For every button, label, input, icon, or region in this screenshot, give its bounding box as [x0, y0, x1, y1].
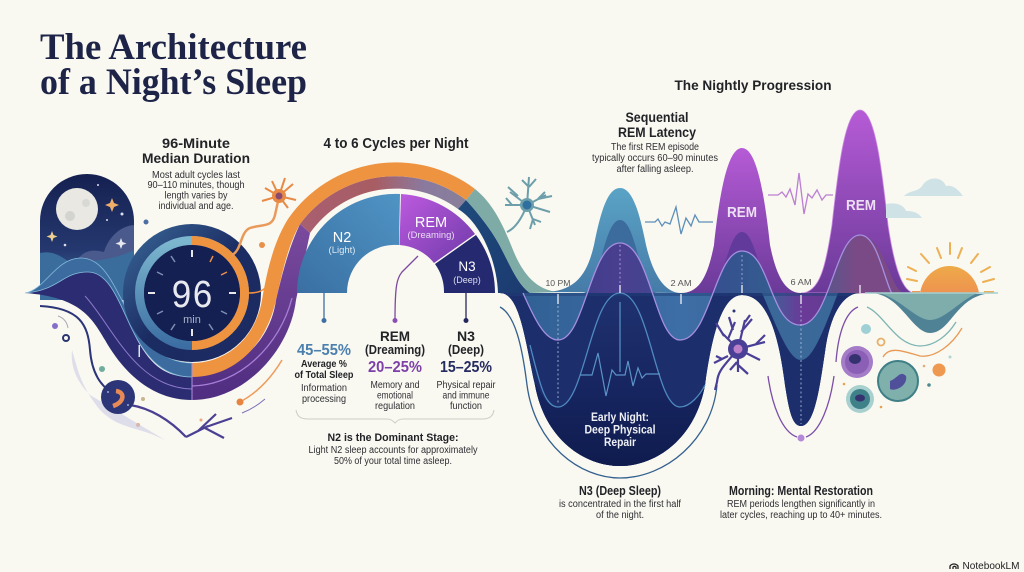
wave: orange and purple cycle band	[192, 162, 475, 400]
icon: purple neuron	[714, 310, 765, 390]
stat: N3 15-25%: Physical repair	[436, 380, 496, 391]
blue stage line	[530, 293, 705, 407]
wave: morning teal dip	[865, 293, 998, 333]
segment: REM dreaming: REM	[415, 215, 447, 231]
stat: REM 20-25%: regulation	[375, 401, 415, 412]
crest: third REM peak	[801, 110, 915, 293]
text block: sequential REM latency: REM Latency	[618, 125, 696, 140]
icon: microbe cells	[841, 324, 952, 413]
stat: REM 20-25%: (Dreaming)	[365, 342, 425, 357]
text block: sequential REM latency: Sequential	[626, 110, 688, 125]
segment: N3 deep: (Deep)	[453, 275, 481, 285]
text block: morning mental restoration: Morning: Mental Restoration	[729, 484, 873, 498]
text block: 96-minute median duration: individual and age.	[158, 201, 234, 212]
stat: N3 15-25%: and immune	[442, 390, 490, 402]
time labels: 6 AM	[790, 277, 812, 287]
label: early night deep physical repair: Repair	[604, 437, 636, 449]
outline under morning trough	[768, 376, 834, 442]
text block: 96-minute median duration: 96-Minute	[162, 135, 230, 151]
icon: clock showing 96 min: 96	[171, 275, 213, 320]
stat: REM 20-25%: REM	[380, 328, 410, 344]
text block: 96-minute median duration: Most adult cycles last	[152, 170, 240, 181]
text block: 96-minute median duration	[142, 135, 250, 212]
callout: N2 is the dominant stage: N2 is the Dominant Stage:	[328, 432, 458, 444]
stat: N3 15-25%	[436, 328, 496, 412]
text block: sequential REM latency: after falling asleep.	[616, 164, 694, 175]
brace bracket	[296, 410, 494, 423]
logo: NotebookLM: NotebookLM	[962, 560, 1020, 572]
text block: sequential REM latency	[592, 110, 718, 175]
early night pulse	[580, 302, 660, 396]
lavender stage line	[523, 235, 975, 340]
leader lines from gauge	[322, 256, 468, 323]
pulse: teal signal	[645, 207, 713, 234]
stat: REM 20-25%: 20–25%	[368, 359, 422, 376]
time labels: 10 PM	[546, 278, 570, 288]
stat: N3 15-25%: function	[450, 401, 482, 412]
text block: 96-minute median duration: length varies by	[164, 190, 228, 202]
text block: morning mental restoration: later cycles, reaching up to 40+ minutes.	[720, 510, 882, 521]
stat: REM 20-25%	[365, 328, 425, 412]
stat: N2 45-55%	[294, 342, 354, 405]
crest: first REM peak	[540, 188, 681, 293]
stat: REM 20-25%: emotional	[377, 390, 413, 402]
icon: clock showing 96 min	[123, 224, 261, 362]
text block: N3 deep sleep: of the night.	[596, 510, 644, 521]
decorative dots left	[52, 220, 282, 427]
segment: REM dreaming: (Dreaming)	[408, 230, 454, 241]
text block: N3 deep sleep: N3 (Deep Sleep)	[579, 484, 661, 498]
layered wave interior	[500, 220, 902, 466]
stat: N2 45-55%: of Total Sleep	[294, 370, 354, 381]
title: of a Night’s Sleep	[40, 62, 307, 103]
time labels	[546, 277, 812, 288]
text block: 96-minute median duration: Median Duration	[142, 150, 250, 166]
icon: clock showing 96 min: min	[183, 314, 201, 326]
text block: morning mental restoration: REM periods lengthen significantly in	[727, 499, 875, 510]
REM labels	[727, 198, 876, 221]
text block: N3 deep sleep	[559, 484, 681, 521]
segment: REM dreaming	[400, 194, 475, 263]
segment: N3 deep: N3	[458, 259, 476, 274]
segment: N3 deep	[435, 235, 495, 293]
stat: N2 45-55%: processing	[302, 394, 346, 405]
callout: N2 is the dominant stage	[308, 432, 478, 467]
wave: teal band descending into night chart	[458, 189, 558, 293]
panel: night sky with moon	[40, 174, 140, 300]
stat: N3 15-25%: (Deep)	[448, 342, 484, 357]
stat: N2 45-55%: Average %	[301, 359, 347, 370]
icon: orange neuron	[232, 178, 296, 293]
chart: nightly sleep progression wave	[500, 110, 912, 466]
icon: teal neuron	[505, 177, 552, 232]
text block: morning mental restoration	[720, 484, 882, 521]
heading: 4 to 6 cycles per night: 4 to 6 Cycles per Night	[324, 136, 469, 152]
heading: the nightly progression: The Nightly Progression	[674, 77, 832, 93]
title	[40, 27, 307, 103]
label: early night deep physical repair: Early Night:	[591, 412, 649, 424]
pulse: purple signal	[768, 173, 833, 214]
stat: N3 15-25%: N3	[457, 328, 475, 344]
stat: N2 45-55%: Information	[301, 383, 347, 394]
segment: N2 light	[297, 194, 400, 293]
time labels: 2 AM	[670, 278, 692, 288]
text block: N3 deep sleep: is concentrated in the first half	[559, 499, 681, 510]
text block: sequential REM latency: The first REM episode	[611, 142, 699, 153]
icon: lower-left neuron with axon	[40, 306, 232, 440]
callout: N2 is the dominant stage: 50% of your total time asleep.	[334, 456, 452, 467]
text block: sequential REM latency: typically occurs 60–90 minutes	[592, 153, 718, 164]
REM labels: REM	[727, 205, 757, 221]
chart: semi-circular sleep stage gauge	[297, 194, 495, 293]
wave: blue and indigo descending band	[25, 258, 192, 400]
crest: second REM peak	[681, 148, 801, 293]
time ticks	[558, 245, 860, 424]
outline under deep sleep basin	[500, 307, 717, 478]
segment: N2 light: N2	[333, 230, 351, 246]
stat: N2 45-55%: 45–55%	[297, 342, 351, 359]
curves below morning dip	[836, 307, 962, 362]
icon: clouds	[886, 178, 963, 218]
label: early night deep physical repair: Deep Physical	[584, 424, 656, 436]
stat: N3 15-25%: 15–25%	[440, 359, 492, 376]
callout: N2 is the dominant stage: Light N2 sleep accounts for approximately	[308, 445, 478, 456]
title: The Architecture	[40, 27, 307, 68]
icon: rising sun	[907, 243, 994, 294]
label: early night deep physical repair	[584, 412, 656, 449]
REM labels: REM	[846, 198, 876, 214]
stat: REM 20-25%: Memory and	[370, 380, 420, 391]
segment: N2 light: (Light)	[329, 245, 355, 256]
text block: 96-minute median duration: 90–110 minutes, though	[148, 180, 244, 191]
